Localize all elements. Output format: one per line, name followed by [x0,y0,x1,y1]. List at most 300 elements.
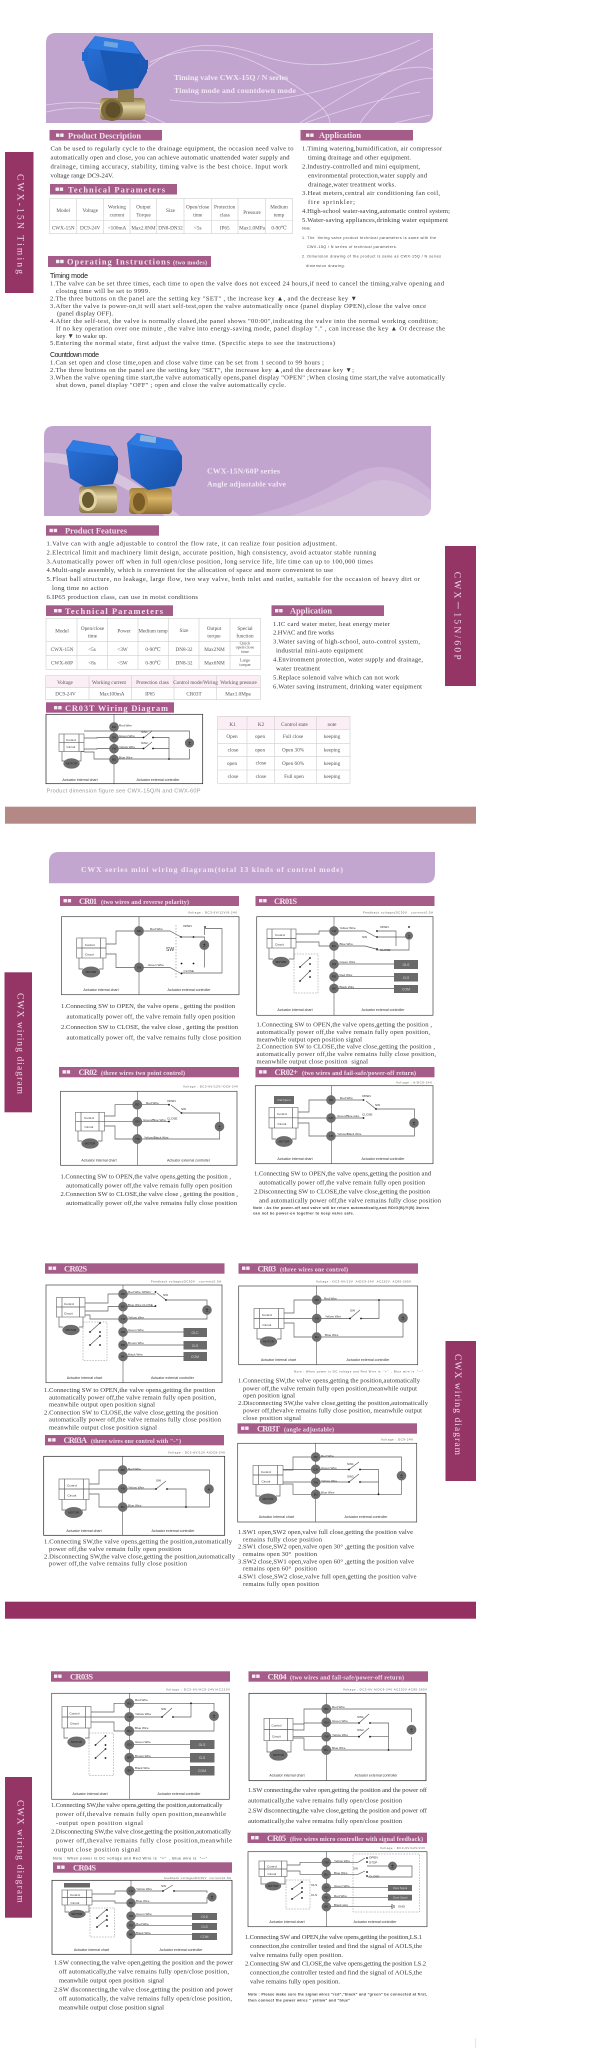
diagram: CR02S wiring: Yellow Wire [128,1316,144,1320]
table: working conditions [46,676,260,700]
heading: application: Application [319,131,361,140]
band: section divider [5,1602,476,1619]
sidebar: CWX wiring diagram: CWX wiring diagram [14,1800,24,1903]
diagram: CR02 wiring: Actuator internal chart [81,1159,117,1163]
text: CR03 instructions: 2.Disconnecting SW,the valve close,getting the position,automatically [238,1400,429,1407]
text: application list: 5.Replace solenoid valve which can not work [273,674,400,681]
text: timing mode [50,273,445,347]
diagram: CR05 wiring: STOP [369,1860,377,1864]
heading: technical parameters [46,605,173,616]
heading: operating instructions: (two modes) [173,260,207,266]
diagram: CR02 wiring: ± [218,1124,221,1130]
text: product description: drainage, timing accuracy, stability, timing valve is the best choice. Input work [50,164,288,170]
text: product features: 3.Automatically power off when in full open/close position, long service life, life time can up to 100,000 times [46,558,373,565]
diagram: CR05 wiring: Yellow Wire [334,1859,350,1863]
diagram: CR01 wiring: SW [166,947,174,953]
text: CR03A instructions [44,1538,236,1568]
icon: timing valve [82,36,148,121]
diagram: CR04 wiring: Circuit [272,1734,281,1738]
sidebar: CWX wiring diagram [4,972,32,1112]
diagram: CR02S wiring: RD [121,1292,125,1296]
diagram: CR02S wiring: Blue Wire CLOSE [128,1303,153,1307]
diagram: CR02S wiring: Control [64,1302,74,1306]
text: application list: 5.Water-saving appliances,drinking water equipment [302,217,448,224]
diagram: CR05 wiring: CLS [311,1893,317,1897]
text: CR03S instructions: -output open position signal [56,1820,143,1827]
table: technical parameters 15N/60P: DN8-32 [175,660,193,666]
diagram: CR01S wiring: Blue Wire [340,942,353,946]
diagram: CR02S wiring: ± [206,1308,209,1314]
banner: timing valve series [46,33,433,123]
diagram: CR01S wiring: CLS [403,976,410,980]
heading: CR01 [60,896,239,906]
diagram: CR03 wiring: Actuator internal chart [261,1358,296,1362]
heading: product description: Product Description [68,132,141,140]
table: technical parameters: CWX-15N [52,226,75,232]
note: CR02+ voltage: Voltage : A/DC9-24V [396,1081,432,1085]
text: application list: 4.Environment protection, water supply and drainage, [273,657,423,664]
text: CR02+ instructions: can not be power-on together to keep valve safe. [253,1212,354,1216]
text: product description [50,146,294,180]
diagram: CR02+ wiring: Fail Open [277,1098,291,1102]
diagram: CR03T wiring: RD [314,1455,318,1459]
diagram: CR04 wiring: BU [324,1748,328,1752]
text: CR04S instructions: off automatically, the valve remains fully open/close position, [59,1995,232,2002]
diagram: CR05 wiring: Blue Wire [334,1871,348,1875]
diagram: CR03T wiring: BU [112,758,116,762]
table: technical parameters 15N/60P: Power [117,628,131,634]
text: application list [302,146,450,224]
diagram: CR01S wiring: Control [275,933,285,937]
diagram: CR02 wiring: Red Wire [146,1101,159,1105]
diagram: CR03A wiring: RD [121,1468,125,1472]
text: CR03A instructions: 1.Connecting SW,the valve opens,getting the position,automatically [44,1538,233,1545]
diagram: CR05 wiring: OPEN [369,1856,378,1860]
table: technical parameters 15N/60P: Model [55,628,69,634]
table: technical parameters: Pressure [243,210,261,216]
diagram: CR03 wiring: SW [350,1308,355,1312]
heading: CR04S: CR04S [73,1864,96,1872]
diagram: CR03 wiring: Blue Wire [325,1333,339,1337]
banner: wiring diagram title [49,852,435,883]
heading: CR03 [238,1263,418,1274]
text: CR03T instructions: remains open 60° position [243,1566,318,1573]
diagram: CR05 wiring: Black wire [334,1903,348,1907]
sidebar: CWX-15N Timing [5,152,34,293]
sidebar: CWX wiring diagram: CWX wiring diagram [14,993,24,1095]
heading: CR03T: CR03T [257,1424,280,1434]
heading: CR03T: (angle adjustable) [284,1426,334,1434]
text: CR03T instructions: 1.SW1 open,SW2 open,valve full close,getting the position valve [238,1529,413,1536]
table: technical parameters 15N/60P: time [88,634,98,640]
table: technical parameters: Model [56,208,71,214]
diagram: CR01 wiring: Red Wire [150,927,163,931]
text: CR02 instructions [60,1173,238,1207]
diagram: CR02+ wiring: G/B [329,1116,334,1120]
table: technical parameters: Medium [270,205,288,211]
heading: application [272,605,384,616]
diagram: CR02 wiring: CLOSE [167,1116,178,1120]
diagram: CR04 wiring: Control [272,1724,282,1728]
heading: CR04S [53,1862,232,1873]
diagram: CR03T wiring: Control [66,738,76,742]
diagram: CR05 wiring: Control [267,1864,277,1868]
table: technical parameters 15N/60P: <8s [88,660,96,666]
diagram: CR03T wiring: Yellow Wire [119,745,135,749]
text: CR02 instructions: 1.Connecting SW to OPEN,the valve opens,getting the position , [60,1173,231,1180]
table: technical parameters 15N/60P [46,618,261,669]
diagram: CR03A wiring: Circuit [68,1494,76,1498]
diagram: CR02S wiring: Red Wire OPEN [128,1290,151,1294]
text: notes: dimension drawing. [306,264,345,268]
table: working conditions: DC9-24V [55,692,76,698]
diagram: CR03S wiring: GN [127,1743,131,1747]
diagram: CR03T wiring: Actuator internal chart [259,1515,294,1519]
diagram: CR03S wiring: Red Wire [135,1698,148,1702]
heading: CR02: CR02 [78,1068,97,1077]
diagram: CR01S wiring: SW [362,935,367,939]
diagram: CR03S wiring: OLS [199,1743,206,1747]
text: CR01 instructions: automatically power off, the valve remain fully open position [66,1014,236,1021]
text: timing mode: 4.After the self-test, the valve is normally closed,the panel shows "00:00",indicating the valve into the normal working condition; [50,318,438,325]
diagram: CR03 wiring: Control [262,1313,272,1317]
diagram: CR04S wiring [52,1880,232,1954]
text: CR02 instructions: 2.Connection SW to CLOSE,the valve close , getting the position , [60,1191,238,1198]
diagram: CR03T wiring: Red Wire [321,1454,334,1458]
table: technical parameters 15N/60P: Quick [240,640,251,645]
text: CR02S instructions: meanwhile output close position signal [49,1424,157,1431]
diagram: CR04S wiring: Black Wire [136,1931,151,1935]
diagram: CR01 wiring: Green Wire [148,963,164,967]
text: CR01S instructions: automatically power off,the valve remains fully close position, [256,1051,436,1058]
text: application list: timing drainage and other equipment. [308,154,411,162]
diagram: CR03A wiring: + [208,1487,211,1493]
diagram: CR02+ wiring: CLOSE [362,1112,372,1116]
banner: wiring diagram title: CWX series mini wiring diagram(total 13 kinds of control mode) [81,865,343,874]
banner title: Angle adjustable valve [207,480,287,488]
diagram: CR01 wiring: GN [137,966,141,970]
text: timing mode: 5.Entering the normal state, first adjust the valve time. (Specific steps to see the instructions) [50,340,335,347]
diagram: CR03T wiring: Actuator internal chart [62,778,98,782]
text: CR02+ instructions: 1.Connecting SW to OPEN,the valve opens,getting the position and [254,1171,432,1178]
text: notes: 1. The timing valve product technical parameters is same with the [302,236,436,240]
table: technical parameters 15N/60P: Max2NM [204,647,225,653]
sidebar: CWX wiring diagram: CWX wiring diagram [452,1354,462,1456]
diagram: CR01S wiring [257,917,433,1015]
text: product description: voltage range DC9-24V. [50,172,114,180]
diagram: CR03T wiring [46,714,203,784]
text: application list: 3.Water saving of high-school, auto-control system, [273,639,420,646]
diagram: CR05 wiring: OLS [311,1883,317,1887]
diagram: CR02S wiring: Circuit [64,1312,73,1316]
diagram: CR02+ wiring: MOTOR [279,1140,289,1144]
heading: CR03: (three wires one control) [280,1266,348,1274]
table: technical parameters: <5s [194,226,201,232]
diagram: CR03 wiring: Red Wire [324,1296,337,1300]
diagram: CR01 wiring: OPEN [183,924,192,928]
heading: CR03A: CR03A [64,1436,87,1445]
text: CR03T instructions: remains fully close position [243,1536,323,1543]
diagram: CR02 wiring: Circuit [84,1125,93,1129]
diagram: CR02 wiring: Y/B [135,1137,140,1141]
text: CR01S instructions [256,1021,436,1065]
diagram: CR02 wiring: Actuator external controller [167,1159,211,1163]
text: CR03T instructions [238,1529,417,1588]
text: CR02 instructions: automatically power off,the valve remains fully close position [66,1200,238,1207]
text: CR05 instructions: connection,the controller tested and find the signal of AOLS,the [250,1970,422,1977]
diagram: CR03T wiring: YW [112,747,117,751]
diagram: CR03A wiring: Control [67,1484,77,1488]
diagram: CR02+ wiring: Y/B [329,1134,333,1138]
diagram: CR03S wiring: ± [213,1714,216,1720]
sidebar: CWX-15N/60P [445,546,476,686]
text: CR04 instructions: 1.SW connecting,the valve open,getting the position and the power off [248,1787,428,1794]
text: CR02 instructions: automatically power off,the valve remain fully open position [66,1182,233,1189]
table: switch states: close [228,774,239,780]
note: CR03T voltage: Voltage : DC9-24V [381,1438,413,1442]
table: switch states: keeping [324,761,341,767]
note: CR05 wiring order: then connect the power wires " yellow" and "blue" [248,1998,350,2002]
diagram: CR04S wiring: Control [70,1893,80,1897]
diagram: CR04 wiring [249,1693,426,1781]
diagram: CR05 wiring: Green Wire [334,1884,350,1888]
text: timing mode: closing time will be set to 9999. [56,288,150,295]
diagram: CR03S wiring: BR [127,1756,131,1760]
note: CR02 voltage: Voltage : DC3-6V/12V/-DC9-24V [183,1085,238,1089]
banner title [174,73,297,95]
diagram: CR02S wiring: Actuator external controller [151,1376,195,1380]
diagram: CR05 wiring: YW [324,1860,329,1864]
text: CR02S instructions [44,1387,222,1431]
table: technical parameters 15N/60P: Medium temp [138,628,168,634]
text: CR05 instructions: valve remains fully open position. [250,1979,340,1986]
table: technical parameters 15N/60P: torque [207,634,221,640]
diagram: CR04S wiring: SW [161,1884,166,1888]
table: technical parameters 15N/60P: 0-90℃ [145,660,161,666]
diagram: CR03S wiring: Yellow Wire [135,1712,151,1716]
text: CR03 instructions: open position ignal [243,1393,295,1400]
diagram: CR01 wiring [62,917,239,995]
diagram: CR03T wiring: GN [314,1467,318,1471]
table: working conditions: Working pressure [220,680,257,686]
text: CR03S instructions: power off,thevalve remain fully open position,meanwhile [56,1811,226,1818]
text: CR03 instructions: close position signal [243,1415,301,1422]
table: switch states: K1 [229,722,236,728]
text: CR03S instructions [51,1802,232,1854]
diagram: CR03S wiring: Actuator external controller [158,1792,201,1796]
diagram: CR05 wiring: Circuit [268,1872,276,1876]
table: switch states: open [255,748,265,754]
note: CR05 wiring order: Note : Please make sure the signal wires "red","black" and "green" be connected at first, [248,1992,427,1996]
diagram: CR03A wiring: Actuator external controller [152,1529,195,1533]
diagram: CR02S wiring: BR [121,1343,125,1347]
diagram: CR05 wiring: Actuator internal chart [269,1920,305,1924]
text: CR03S instructions: power off,thevalve remains fully close position,meanwhile [56,1838,232,1845]
diagram: CR01 wiring: MOTOR [86,970,96,974]
text: CR01S instructions: meanwhile output close position signal [256,1058,368,1065]
table: technical parameters 15N/60P: function [236,632,254,640]
diagram: CR05 wiring: GN [324,1886,328,1890]
diagram: CR04S wiring: RD [129,1923,133,1927]
heading: CR03A: (three wires one control with "-") [91,1438,181,1445]
diagram: CR03T wiring: Yellow Wire [321,1479,337,1483]
table: switch states: keeping [324,774,341,780]
text: CR01 instructions: automatically power off, the valve remains fully close position [66,1034,242,1041]
table: working conditions: Control mode/Wiring [173,680,218,686]
diagram: CR05 wiring: RD [324,1896,328,1900]
diagram: CR04 wiring: Red Wire [332,1705,345,1709]
text: CR03S instructions: output close position signal [54,1847,140,1854]
table: switch states: Full open [284,774,304,780]
text: timing mode: 2.The three buttons on the panel are the setting key "SET" , the increase key ▲, and the decrease key ▼ [50,296,357,302]
diagram: CR02S wiring: Green Wire [128,1328,144,1332]
heading: CR04 [248,1671,428,1682]
diagram: CR02+ wiring: Actuator internal chart [277,1157,313,1161]
table: working conditions: Voltage [57,680,74,686]
diagram: CR03T wiring: MOTOR [263,1497,273,1501]
text: application list: 3.Heat meters,central air conditioning fan coil, [302,190,440,197]
diagram: CR03T wiring: Green Wire [119,734,135,738]
diagram: CR03 wiring [239,1286,418,1365]
text: application list: water treatment [276,666,320,673]
heading: CR05: CR05 [267,1834,286,1843]
diagram: CR02S wiring: SW [163,1293,168,1297]
text: CR04S instructions: 1.SW connecting,the valve open,getting the position and the power [54,1960,234,1967]
text: CR03A instructions: power off,the valve remain fully open position [49,1546,182,1553]
icon: valve small [66,440,118,513]
diagram: CR03T wiring: YW [313,1480,318,1484]
table: working conditions: Working current [92,680,127,686]
text: CR01S instructions: 2.Connection SW to CLOSE,the valve close,getting the position , [256,1043,435,1050]
heading: CR05: (five wires micro controller with signal feedback) [290,1836,423,1843]
table: technical parameters: Torque [136,212,152,218]
text: countdown mode: shut down, panel display "OFF" ; open and close the valve automatically cycle. [56,382,286,389]
diagram: CR03S wiring: CLS [199,1756,206,1760]
text: CR03T instructions: remains open 30° position [243,1551,318,1558]
table: technical parameters: Open/close [186,205,210,211]
heading: CR05 [248,1833,427,1843]
diagram: CR03 wiring: Actuator external controller [347,1358,390,1362]
text: product features: long time no action [52,585,109,592]
diagram: CR04S wiring: GN [129,1914,133,1918]
diagram: CR02S wiring: Black Wire [128,1352,143,1356]
diagram: CR02+ wiring: ± [413,1121,416,1127]
diagram: CR01S wiring: Circuit [275,942,284,946]
diagram: CR04 wiring: Yellow Wire [332,1733,348,1737]
diagram: CR03A wiring: MOTOR [68,1510,79,1514]
table: switch states: keeping [324,734,341,740]
diagram: CR03T wiring: BU [314,1492,318,1496]
text: product features: 4.Multi-angle assembly, which is convenient for the allocation of space and more convenient to use [46,567,333,574]
diagram: CR03 wiring: YW [314,1316,319,1320]
note: CR05 voltage: Voltage : DC3-6V/12V/24V [380,1846,425,1850]
diagram: CR04 wiring: Blue Wire [332,1746,346,1750]
diagram: CR03S wiring: Green Wire [135,1740,151,1744]
table: technical parameters: DC9-24V [80,226,101,232]
diagram: CR03T wiring: SW2 [141,741,148,745]
text: product features: 5.Float ball structure, no leakage, large flow, two way valve, both inlet and outlet, suitable for the occasion of heavy dirt or [46,576,421,583]
text: CR03A instructions: 2.Disconnecting SW,the valve close,getting the position,automatically [44,1553,236,1560]
text: product features: 2.Electrical limit and machinery limit design, accurate position, high consistency, avoid actuator stable running [46,550,377,556]
table: technical parameters: DN8-DN32 [158,226,183,232]
text: timing mode: If no key operation over one minute , the valve into energy-saving mode, panel display "." , can increase the key ▲ Or decrease the [56,326,445,332]
table: technical parameters 15N/60P: CWX-60P [51,660,73,666]
diagram: CR04 wiring: Actuator external controller [355,1774,398,1778]
table: technical parameters: 0-90℃ [271,226,287,232]
text: CR03S instructions: 2.Disconnecting SW,the valve close,getting the position,automatically [51,1829,232,1836]
diagram: CR03S wiring: Black Wire [135,1766,150,1770]
text: CR04 instructions: automatically,the valve remains fully open/close position [248,1797,403,1804]
text: CR05 instructions [245,1934,426,1986]
table: technical parameters 15N/60P: DN8-32 [175,647,193,653]
diagram: CR02S wiring: Brown Wire [128,1341,144,1345]
diagram: CR03S wiring: YW [127,1715,132,1719]
text: CR04 instructions: automatically,the valve remains fully open/close position [248,1818,403,1825]
diagram: CR04S wiring: Blue Wire [136,1899,150,1903]
text: CR01 instructions: 2.Connection SW to CLOSE, the valve close , getting the position [61,1024,239,1031]
diagram: CR05 wiring: MOTOR [268,1884,278,1888]
diagram: CR04 wiring: GN [324,1720,328,1724]
sidebar: CWX-15N/60P: CWX－15N/60P [452,572,462,660]
table: switch states: Control state [281,722,309,728]
diagram: CR02S wiring: BU [121,1305,125,1309]
diagram: CR03S wiring: COM [198,1769,206,1773]
text: CR03T instructions: remains fully open position [243,1581,320,1588]
note: CR03S polarity: Note : When power is DC voltage and Red Wire is "+" , Blue wire is "—" [53,1856,208,1860]
table: switch states: keeping [324,748,341,754]
diagram: CR02 wiring: SW [181,1107,186,1111]
diagram: CR04 wiring: RD [324,1707,328,1711]
table: switch states: Open 60% [282,761,305,767]
heading: CR01: CR01 [79,897,97,906]
table: technical parameters 15N/60P: Special [237,626,253,632]
diagram: CR01S wiring: Green Wire [340,960,356,964]
table: technical parameters: Size [166,208,176,214]
table: switch states: open [227,761,237,767]
text: CR02S instructions: 2.Connection SW to CLOSE,the valve close,getting the position [44,1409,219,1416]
diagram: CR04 wiring: Green Wire [332,1719,348,1723]
heading: CR03A [45,1435,224,1445]
diagram: CR02+ wiring: Circuit [278,1122,286,1126]
table: working conditions: IP65 [145,692,155,698]
diagram: CR04S wiring: MOTOR [72,1912,82,1916]
text: notes: Note: [302,226,311,230]
banner: angle adjustable series [44,426,431,516]
diagram: CR04 wiring: SW2 [357,1728,364,1732]
heading: CR02+: (two wires and fail-safe/power-off return) [302,1070,416,1077]
text: countdown mode [50,352,446,389]
heading: CR02+ [256,1067,434,1077]
table: switch states: Open [226,734,238,740]
diagram: CR03T wiring: Actuator external controller [345,1515,388,1519]
table: technical parameters 15N/60P: CWX-15N [51,647,74,653]
diagram: CR02 wiring: Green/Blue Wire [143,1118,166,1122]
diagram: CR04S wiring: ± [211,1895,214,1901]
table: technical parameters 15N/60P: <5s [88,647,96,653]
diagram: CR03S wiring: RD [127,1701,131,1705]
diagram: CR04 wiring: MOTOR [273,1753,284,1757]
text: CR02+ instructions [253,1171,442,1216]
text: application list: 4.High-school water-saving,automatic control system; [302,208,450,215]
table: switch states: close [256,760,267,766]
diagram: CR03A wiring: Actuator internal chart [66,1529,102,1533]
diagram: CR03T wiring: Blue Wire [119,756,133,760]
diagram: CR04S wiring: BK [129,1932,133,1936]
banner title: Timing mode and countdown mode [174,86,297,95]
diagram: CR02S wiring: OLC [192,1331,199,1335]
text: notes: CWX-15Q / N series of technical parameters. [307,245,397,249]
heading: CR02 [59,1067,239,1077]
